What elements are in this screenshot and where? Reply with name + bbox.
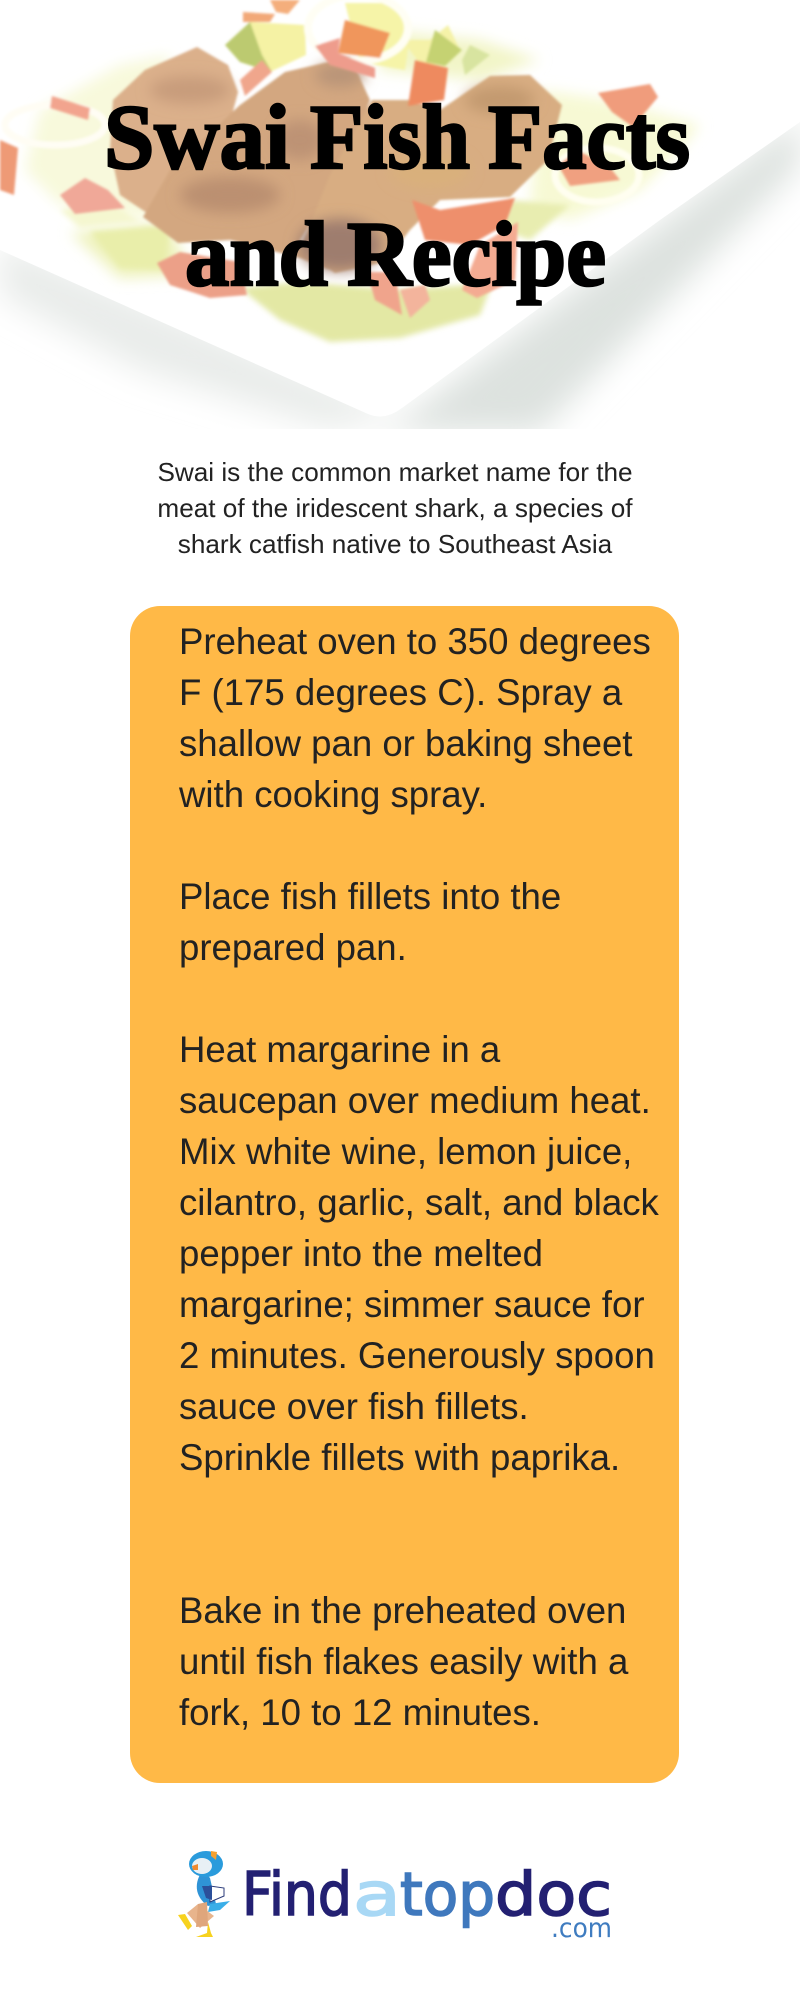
onion rings [308, 0, 408, 61]
title line 1: Swai [104, 86, 290, 188]
plate shadow [0, 118, 800, 432]
lettuce bed [25, 30, 700, 342]
wordmark [242, 1860, 612, 1944]
wordmark: doc [495, 1860, 612, 1930]
title line 2: Recipe [347, 203, 606, 305]
plate [0, 0, 800, 416]
title [104, 86, 690, 306]
recipe text: Preheat oven to 350 degrees F (175 degrees C). Spray a shallow pan or baking sheet with cooking spray. Place fish fillets into the prepared pan. Heat margarine in a saucepan over medium heat. Mix white wine, lemon juice, cilantro, garlic, salt, and black pepper into the melted margarine; simmer sauce for 2 minutes. Generously spoon sauce over fish fillets. Sprinkle fillets with paprika. Bake in the preheated oven until fish flakes easily with a fork, 10 to 12 minutes. [179, 621, 659, 1733]
lime wedges [225, 22, 306, 72]
logo: Findatopdoc.com [178, 1851, 612, 1944]
wordmark: .com [551, 1913, 612, 1944]
intro text: Swai is the common market name for the meat of the iridescent shark, a species of shark catfish native to Southeast Asia [157, 457, 633, 559]
icon: duck mascot [178, 1851, 230, 1937]
tomato pieces [338, 20, 390, 58]
wordmark: Find [242, 1860, 352, 1930]
panel: recipe steps [130, 606, 679, 1783]
fish fillets [110, 47, 562, 273]
hero photo: plate of swai fish on salad [0, 0, 800, 429]
title line 2: and [185, 203, 328, 305]
wordmark: top [400, 1860, 495, 1930]
title line 1: Fish [310, 86, 470, 188]
title line 1 [104, 86, 690, 188]
title line 2 [185, 203, 606, 305]
fish char marks [150, 63, 535, 271]
title line 1: Facts [488, 86, 690, 188]
salad vegetables [0, 0, 658, 318]
wordmark: a [353, 1860, 401, 1930]
